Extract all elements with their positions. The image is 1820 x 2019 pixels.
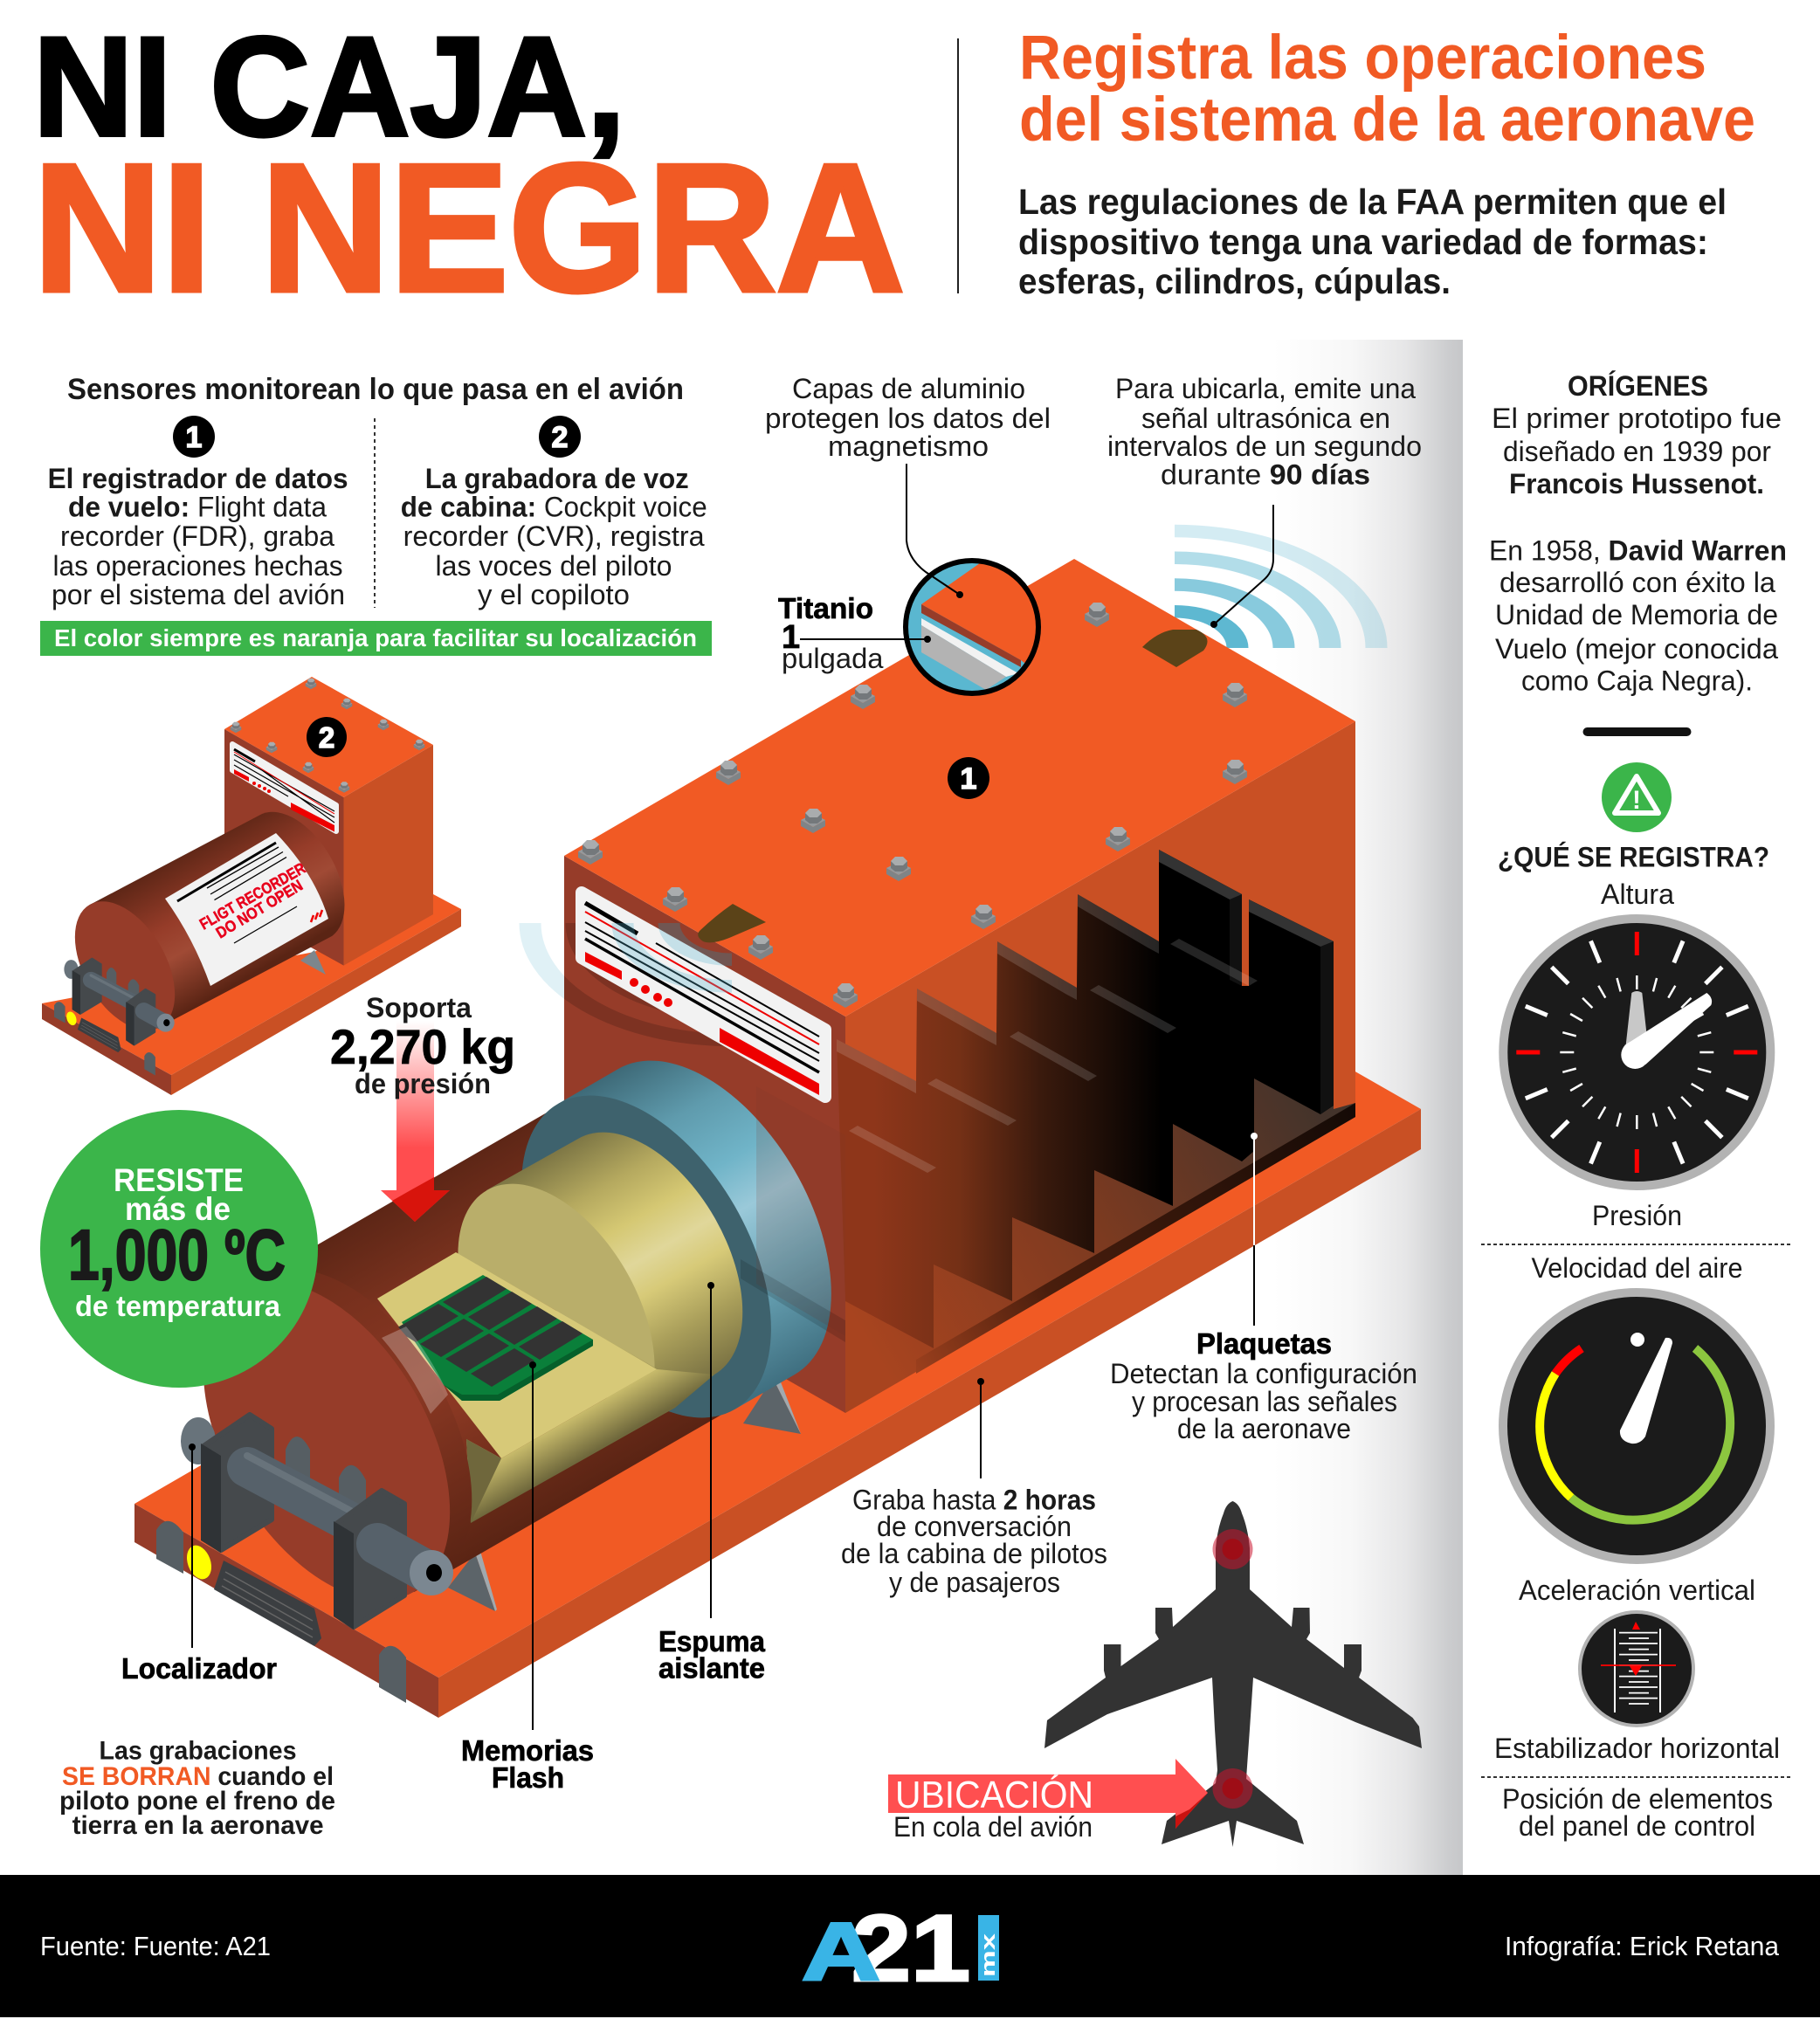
pressure text: de presión: [355, 1068, 491, 1099]
recorder end cap: [203, 1228, 472, 1654]
text: flight data recorder: de vuelo: Flight data: [68, 491, 327, 522]
number badge 1: 1: [186, 421, 202, 454]
label: locator: Localizador: [121, 1652, 277, 1685]
label: aluminium: magnetismo: [828, 431, 989, 462]
heading: what is recorded: ¿QUÉ SE REGISTRA?: [1498, 842, 1769, 873]
label: control panel: [1502, 1783, 1773, 1842]
intro text: esferas, cilindros, cúpulas.: [1018, 261, 1451, 301]
panel: origins: [1481, 370, 1793, 1842]
label: recording time: de la cabina de pilotos: [841, 1538, 1107, 1569]
origins text: El primer prototipo fue: [1492, 403, 1782, 434]
gauge: airspeed: [1503, 1292, 1770, 1560]
number badge 2: [539, 416, 581, 458]
origins text: Francois Hussenot.: [1509, 468, 1764, 500]
waves through box: [564, 923, 732, 1046]
temperature badge: [40, 1110, 318, 1388]
label: control panel: del panel de control: [1519, 1810, 1755, 1842]
label: aluminium: protegen los datos del: [765, 403, 1051, 434]
airplane: [1044, 1501, 1422, 1847]
side shading: [1272, 340, 1463, 1877]
label: boards: [1110, 1327, 1417, 1444]
leader: titanium: [800, 636, 931, 643]
label: pressure: Presión: [1592, 1200, 1682, 1231]
tail marker: [1212, 1768, 1252, 1809]
label: boards: de la aeronave: [1177, 1413, 1351, 1444]
label: ultrasonic signal: [1107, 373, 1422, 491]
foam core: [377, 1133, 742, 1523]
logo: [802, 1895, 999, 2001]
small number badge: [307, 717, 347, 757]
location caption: En cola del avión: [893, 1811, 1093, 1843]
label: foam: aislante: [658, 1652, 765, 1685]
dashed divider: [1481, 1776, 1793, 1778]
label: recording time: [841, 1485, 1107, 1598]
gauge: altitude: [1503, 919, 1770, 1186]
blue insulation ring: [521, 1041, 831, 1472]
source: Fuente: Fuente: A21: [40, 1931, 271, 1961]
small cylinder: [75, 812, 344, 1052]
location arrow: UBICACIÓN: [895, 1774, 1093, 1816]
subtitle: [1019, 24, 1755, 155]
circuit boards: [837, 850, 1334, 1348]
label: titanium: 1: [782, 619, 800, 656]
number badge on box: [948, 757, 989, 799]
origins text: ORÍGENES: [1568, 370, 1708, 402]
label: recording time: de conversación: [877, 1511, 1072, 1542]
text: cockpit voice recorder: de cabina: Cockpit voice: [401, 491, 707, 522]
label: titanium: Titanio: [778, 592, 873, 624]
hatch: [698, 904, 766, 942]
stand rear: [743, 1375, 801, 1434]
small recorder: [42, 677, 461, 1095]
label: boards: Detectan la configuración: [1110, 1358, 1417, 1389]
sensors heading: Sensores monitorean lo que pasa en el avión: [67, 373, 684, 406]
label: control panel: Posición de elementos: [1502, 1783, 1773, 1815]
number badge on box: 1: [961, 762, 976, 796]
origins text: desarrolló con éxito la: [1499, 567, 1775, 598]
small number badge: 2: [319, 721, 334, 754]
intro text: Las regulaciones de la FAA permiten que el: [1018, 182, 1727, 222]
small box: [224, 677, 433, 966]
note: erase: SE BORRAN cuando el: [62, 1762, 334, 1791]
text: cockpit voice recorder: y el copiloto: [478, 579, 630, 610]
subtitle: del sistema de la aeronave: [1019, 86, 1755, 155]
footer: [0, 1875, 1820, 2017]
label: titanium: [778, 592, 884, 674]
label: recording time: y de pasajeros: [889, 1567, 1060, 1598]
title: NI CAJA,: [33, 8, 625, 166]
label plate: [582, 892, 825, 1097]
dark floor strip: [916, 1103, 1355, 1374]
label: ultrasonic signal: señal ultrasónica en: [1141, 403, 1390, 434]
label: vertical acceleration: Aceleración vertical: [1519, 1575, 1755, 1606]
box left face: [564, 856, 845, 1413]
label: titanium: pulgada: [782, 643, 884, 674]
flash memory board: [395, 1275, 593, 1401]
number badge 2: 2: [552, 421, 568, 454]
label: foam: [658, 1625, 766, 1685]
label: ultrasonic signal: intervalos de un segundo: [1107, 431, 1422, 462]
dashed divider: [374, 418, 376, 608]
intro text: [1018, 182, 1727, 301]
origins text: Unidad de Memoria de: [1495, 599, 1778, 631]
text: flight data recorder: por el sistema del avión: [52, 579, 345, 610]
label: airspeed: Velocidad del aire: [1532, 1252, 1743, 1284]
label: flash memories: Memorias: [461, 1734, 594, 1767]
origins text: como Caja Negra).: [1521, 665, 1753, 697]
leader: locator: [189, 1444, 196, 1648]
label: boards: Plaquetas: [1196, 1327, 1332, 1360]
leader: boards: [1251, 1133, 1258, 1326]
translucent box panel over ring: [756, 1086, 845, 1336]
label: flash memories: Flash: [492, 1761, 564, 1794]
subtitle: Registra las operaciones: [1019, 24, 1706, 93]
title: NI NEGRA: [33, 127, 905, 330]
temperature badge: RESISTE: [114, 1162, 244, 1198]
temperature badge: de temperatura: [75, 1290, 281, 1322]
text: flight data recorder: las operaciones hechas: [52, 550, 342, 582]
label: ultrasonic signal: durante 90 días: [1161, 459, 1370, 491]
icon: warning: !: [1632, 786, 1641, 815]
label: boards: y procesan las señales: [1132, 1386, 1397, 1417]
translucent base edge over ring: [741, 1259, 845, 1342]
text: cockpit voice recorder: [401, 463, 707, 610]
small stand: [300, 950, 326, 975]
logo: mx: [977, 1933, 999, 1977]
lens detail: titanium: [903, 558, 1041, 696]
credit: Infografía: Erick Retana: [1505, 1931, 1780, 1961]
origins text: diseñado en 1939 por: [1503, 436, 1771, 467]
main recorder illustration: [134, 559, 1421, 1718]
origins text: [1489, 370, 1787, 697]
logo: A: [802, 1905, 880, 1997]
leader: recording: [977, 1378, 984, 1478]
green banner: El color siempre es naranja para facilitar su localización: [54, 624, 697, 651]
box right face: [845, 721, 1355, 1413]
cylinder shell: [239, 1106, 734, 1592]
text: flight data recorder: recorder (FDR), graba: [60, 520, 334, 552]
temperature badge: más de: [125, 1191, 231, 1227]
pressure text: [330, 992, 515, 1099]
leader: flash: [529, 1361, 536, 1730]
text: flight data recorder: [48, 463, 348, 610]
icon: warning: [1602, 762, 1672, 832]
text: cockpit voice recorder: La grabadora de voz: [425, 463, 689, 494]
note: erase: tierra en la aeronave: [72, 1811, 324, 1840]
temperature badge: 1,000 ºC: [68, 1216, 286, 1295]
mounting hardware: [156, 1415, 453, 1703]
small label plate: [232, 744, 336, 831]
dashed divider: [1481, 1244, 1793, 1245]
label: aluminium: [765, 373, 1051, 462]
pressure text: Soporta: [366, 992, 472, 1023]
label: recording time: Graba hasta 2 horas: [852, 1485, 1096, 1516]
number badge 1: [173, 416, 215, 458]
small base plate: [42, 894, 461, 1095]
separator pill: [1582, 727, 1691, 736]
small warning sheet: DO NOT OPEN: [213, 877, 306, 941]
note: erase: piloto pone el freno de: [59, 1787, 335, 1816]
stand front: [448, 1551, 497, 1611]
bolts: [578, 603, 1247, 1008]
label: foam: Espuma: [658, 1625, 766, 1657]
text: cockpit voice recorder: las voces del piloto: [435, 550, 672, 582]
logo: 21: [851, 1895, 970, 2001]
label: altitude: Altura: [1601, 879, 1674, 910]
note: erase: Las grabaciones: [100, 1737, 297, 1766]
hatch: [1142, 630, 1207, 667]
box top: [564, 559, 1355, 1016]
base plate: [134, 935, 1421, 1718]
small warning sheet: FLIGT RECORDER: [196, 859, 308, 933]
origins text: En 1958, David Warren: [1489, 534, 1787, 566]
leader: foam: [707, 1282, 714, 1618]
small warning sheet: [165, 833, 328, 986]
text: cockpit voice recorder: recorder (CVR), registra: [403, 520, 705, 552]
small hardware: [54, 959, 175, 1076]
leader: signal: [1210, 505, 1273, 628]
label: flash memories: [461, 1734, 594, 1794]
text: flight data recorder: El registrador de datos: [48, 463, 348, 494]
label: stabilizer: Estabilizador horizontal: [1494, 1733, 1780, 1764]
note: erase: [59, 1737, 335, 1840]
intro text: dispositivo tenga una variedad de formas:: [1018, 222, 1708, 262]
location arrow: [888, 1759, 1208, 1829]
label: aluminium: Capas de aluminio: [792, 373, 1025, 404]
title: [33, 8, 905, 330]
divider: [957, 38, 959, 293]
signal waves left: [530, 923, 732, 1040]
signal waves right: [1175, 531, 1376, 648]
gauge: stabilizer: [1580, 1612, 1693, 1726]
pressure arrow: [381, 1021, 450, 1222]
pressure text: 2,270 kg: [330, 1019, 515, 1074]
floor under boards: [845, 987, 1355, 1413]
origins text: Vuelo (mejor conocida: [1495, 633, 1778, 665]
leader: aluminium: [907, 464, 963, 598]
label: ultrasonic signal: Para ubicarla, emite una: [1115, 373, 1416, 404]
